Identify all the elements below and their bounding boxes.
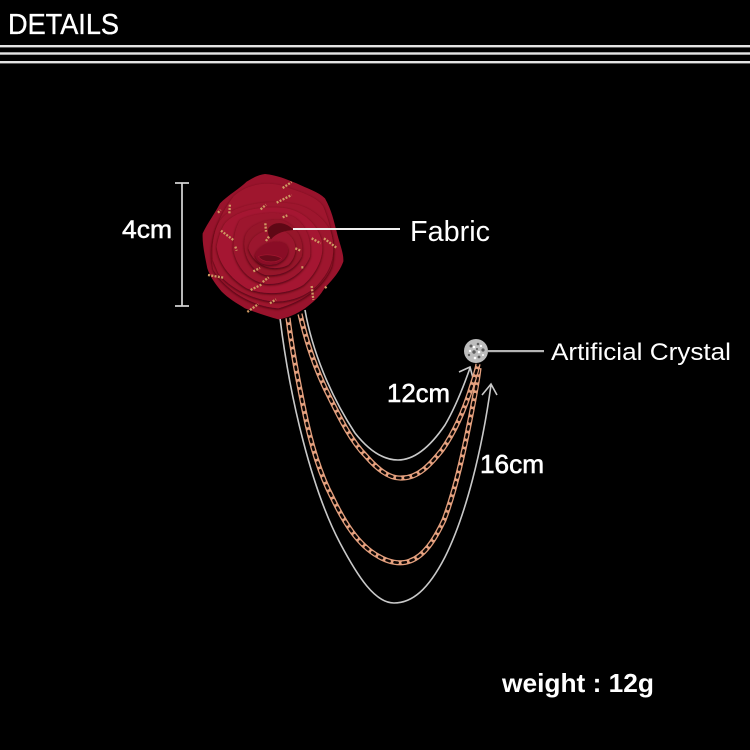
rose petal ring 3 <box>233 213 310 284</box>
label: Fabric: Fabric <box>410 216 490 248</box>
label: 4cm: 4cm <box>122 216 172 244</box>
label: 12cm: 12cm <box>387 378 450 408</box>
rose gold stitching <box>208 182 337 312</box>
rose centre spiral <box>258 255 282 262</box>
chain: lower strand <box>288 318 479 563</box>
label: Artificial Crystal: Artificial Crystal <box>551 339 731 366</box>
chain: upper strand <box>300 314 478 478</box>
icon: crystal stud <box>464 339 488 363</box>
rose petal ring 5 <box>248 230 295 268</box>
heading: DETAILS: DETAILS <box>8 9 119 41</box>
rose petal ring 4 <box>244 220 302 275</box>
rose outer silhouette <box>203 174 343 319</box>
callout: crystal leader line <box>488 350 544 352</box>
rose dark crescent <box>268 223 293 239</box>
header rules <box>0 45 750 63</box>
label: 16cm: 16cm <box>480 449 544 479</box>
label: weight: weight : 12g <box>501 668 654 698</box>
rose back petal <box>212 184 333 308</box>
rose centre <box>255 242 288 265</box>
arc: 16cm measure with arrow <box>280 318 497 603</box>
rose petal ring 1 <box>212 202 333 302</box>
icon: rose fabric flower <box>203 174 343 319</box>
arc: 12cm measure with arrow <box>305 310 473 460</box>
dimension bracket: 4cm <box>175 183 189 306</box>
callout: Fabric leader line <box>293 228 400 230</box>
rose petal ring 2 <box>217 207 322 293</box>
